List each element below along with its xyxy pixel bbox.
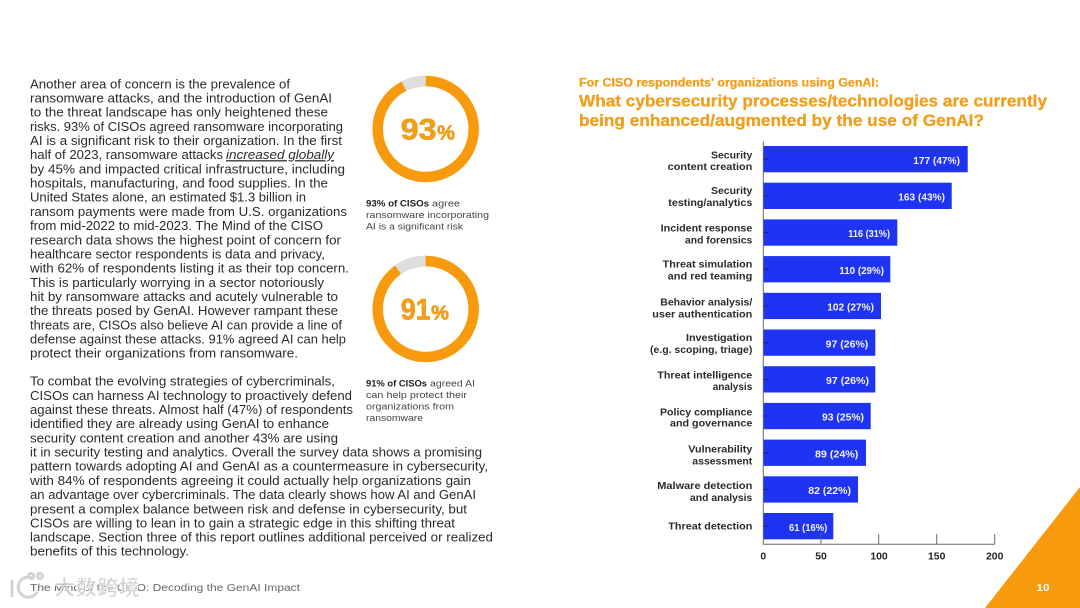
text block: countermeasure paragraph: landscape. Section three of this report outlines additional perceived or realized: [30, 531, 493, 545]
caption: 91% of CISOs: ransomware: [366, 413, 423, 424]
page number: 10: [1036, 583, 1050, 594]
footer title: The Mind of the CISO: Decoding the GenAI Impact: [30, 583, 300, 594]
text block: ransomware paragraph: threats are, CISOs also believe AI can provide a line of: [30, 318, 343, 332]
text block: ransomware paragraph: United States alone, an estimated $1.3 billion in: [30, 191, 306, 205]
text block: countermeasure paragraph: present a complex balance between risk and defense in cybersecurity, but: [30, 502, 468, 516]
text block: ransomware paragraph: healthcare sector respondents is data and privacy,: [30, 248, 325, 262]
bar value labels: 93 (25%): [822, 413, 864, 424]
text block: ransomware paragraph: half of 2023, ransomware attacks: [30, 148, 223, 162]
bar category labels: Behavior analysis/: [660, 298, 752, 309]
caption: 93% of CISOs: [366, 199, 489, 233]
bar category labels: testing/analytics: [668, 198, 753, 209]
bar category labels: Threat intelligence: [657, 370, 753, 381]
text block: ransomware paragraph: by 45% and impacted critical infrastructure, including: [30, 162, 345, 176]
text block: ransomware paragraph: increased globally: [226, 148, 335, 162]
axes and ticks: [763, 142, 995, 544]
bar value labels: 89 (24%): [815, 449, 858, 460]
donut chart: 93%: [378, 81, 474, 177]
text block: countermeasure paragraph: To combat the evolving strategies of cybercriminals,: [30, 375, 335, 389]
text block: ransomware paragraph: protect their organizations from ransomware.: [30, 347, 298, 361]
text block: countermeasure paragraph: against these threats. Almost half (47%) of respondents: [30, 403, 353, 417]
bar value labels: 97 (26%): [826, 376, 869, 387]
bar category labels: and red teaming: [668, 271, 752, 282]
caption: 93% of CISOs: agree: [432, 199, 460, 210]
donut chart: 93%: 93: [401, 114, 437, 146]
text block: ransomware paragraph: from mid-2022 to mid-2023. The Mind of the CISO: [30, 219, 323, 233]
x-axis tick labels: 150: [928, 551, 946, 562]
bar category labels: user authentication: [652, 309, 752, 320]
bar category labels: Incident response: [661, 224, 753, 235]
bar category labels: [650, 150, 753, 532]
text block: countermeasure paragraph: an advantage over cybercriminals. The data clearly shows how AI and GenAI: [30, 488, 476, 502]
text block: ransomware paragraph: risks. 93% of CISOs agreed ransomware incorporating: [30, 120, 343, 134]
caption: 91% of CISOs: agreed AI: [430, 379, 475, 390]
text block: ransomware paragraph: AI is a significant risk to their organization. In the first: [30, 134, 343, 148]
heading: chart question: [579, 78, 1048, 130]
caption: 93% of CISOs: AI is a significant risk: [366, 222, 463, 233]
bar category labels: assessment: [692, 456, 753, 467]
bar category labels: analysis: [713, 382, 753, 393]
text block: ransomware paragraph: the threats posed by GenAI. However rampant these: [30, 304, 338, 318]
bar value labels: 61 (16%): [789, 523, 827, 534]
bar category labels: Security: [711, 186, 753, 197]
bar category labels: Policy compliance: [660, 408, 753, 419]
bar value labels: 97 (26%): [826, 339, 868, 350]
bar value labels: 177 (47%): [913, 156, 960, 167]
x-axis tick labels: 50: [815, 551, 827, 562]
heading: chart question: For CISO respondents' organizations using GenAI:: [579, 78, 879, 90]
text block: ransomware paragraph: This is particularly worrying in a sector notoriously: [30, 276, 325, 290]
watermark text: 大数跨境: [54, 572, 140, 602]
text block: ransomware paragraph: hospitals, manufacturing, and food supplies. In the: [30, 177, 328, 191]
text block: ransomware paragraph: ransom payments were made from U.S. organizations: [30, 205, 347, 219]
bar chart: GenAI use by process: [650, 142, 1004, 562]
text block: ransomware paragraph: with 62% of respondents listing it as their top concern.: [29, 262, 349, 276]
bar category labels: content creation: [668, 162, 752, 173]
x-axis tick labels: 200: [986, 551, 1004, 562]
bar category labels: Investigation: [686, 333, 752, 344]
text block: countermeasure paragraph: identified they are already using GenAI to enhance: [30, 417, 329, 431]
bar category labels: and governance: [670, 419, 753, 430]
x-axis tick labels: [760, 551, 1004, 562]
bar value labels: 102 (27%): [827, 303, 874, 314]
donut chart: 91%: 91: [401, 294, 431, 326]
donut chart: 91%: [378, 261, 474, 357]
text block: countermeasure paragraph: CISOs are willing to lean in to gain a strategic edge in this shifting threat: [30, 516, 456, 530]
text block: ransomware paragraph: [29, 77, 349, 361]
text block: countermeasure paragraph: CISOs can harness AI technology to proactively defend: [30, 389, 352, 403]
text block: ransomware paragraph: to the threat landscape has only heightened these: [30, 106, 328, 120]
text block: countermeasure paragraph: security content creation and another 43% are using: [30, 431, 338, 445]
text block: countermeasure paragraph: with 84% of respondents agreeing it could actually help organizations gain: [29, 474, 471, 488]
text block: ransomware paragraph: defense against these attacks. 91% agreed AI can help: [30, 332, 346, 346]
text block: countermeasure paragraph: pattern towards adopting AI and GenAI as a countermeasure in cybersecurity,: [30, 460, 488, 474]
watermark logo: [12, 573, 43, 597]
text block: ransomware paragraph: Another area of concern is the prevalence of: [30, 77, 291, 91]
heading: chart question: What cybersecurity processes/technologies are currently: [579, 93, 1048, 111]
caption: 93% of CISOs: ransomware incorporating: [366, 210, 489, 221]
watermark: [12, 572, 140, 602]
bar category labels: Threat simulation: [663, 260, 752, 271]
text block: ransomware paragraph: ransomware attacks, and the introduction of GenAI: [30, 92, 332, 106]
bar value labels: 116 (31%): [848, 229, 890, 240]
heading: chart question: being enhanced/augmented by the use of GenAI?: [579, 112, 984, 130]
bar value labels: 163 (43%): [898, 192, 945, 204]
text block: countermeasure paragraph: benefits of this technology.: [30, 545, 189, 559]
bar category labels: and forensics: [685, 235, 753, 246]
text block: countermeasure paragraph: it in security testing and analytics. Overall the survey data shows a promising: [30, 446, 482, 460]
bar category labels: (e.g. scoping, triage): [650, 345, 752, 356]
bar category labels: and analysis: [690, 493, 753, 504]
bars: [763, 146, 968, 539]
bar value labels: 82 (22%): [808, 486, 851, 497]
caption: 91% of CISOs: [366, 379, 475, 424]
caption: 91% of CISOs: can help protect their: [366, 390, 468, 401]
bar value labels: 110 (29%): [839, 266, 884, 277]
text block: ransomware paragraph: research data shows the highest point of concern for: [30, 233, 341, 247]
text block: ransomware paragraph: hit by ransomware attacks and acutely vulnerable to: [30, 290, 338, 304]
bar category labels: Threat detection: [668, 521, 752, 532]
caption: 91% of CISOs: organizations from: [366, 402, 454, 413]
panel: left article text: [29, 77, 493, 559]
corner triangle: [985, 487, 1080, 608]
caption: 91% of CISOs: 91% of CISOs: [366, 379, 427, 390]
caption: 93% of CISOs: 93% of CISOs: [366, 199, 429, 210]
bar value labels: [789, 156, 960, 534]
bar category labels: Vulnerability: [688, 444, 753, 455]
bar category labels: Security: [711, 150, 753, 162]
x-axis tick labels: 100: [870, 551, 888, 562]
donut chart: 93%: %: [437, 122, 455, 144]
text block: countermeasure paragraph: [29, 375, 493, 559]
donut chart: 91%: %: [431, 302, 449, 324]
x-axis tick labels: 0: [760, 551, 766, 562]
bar category labels: Malware detection: [657, 481, 752, 492]
